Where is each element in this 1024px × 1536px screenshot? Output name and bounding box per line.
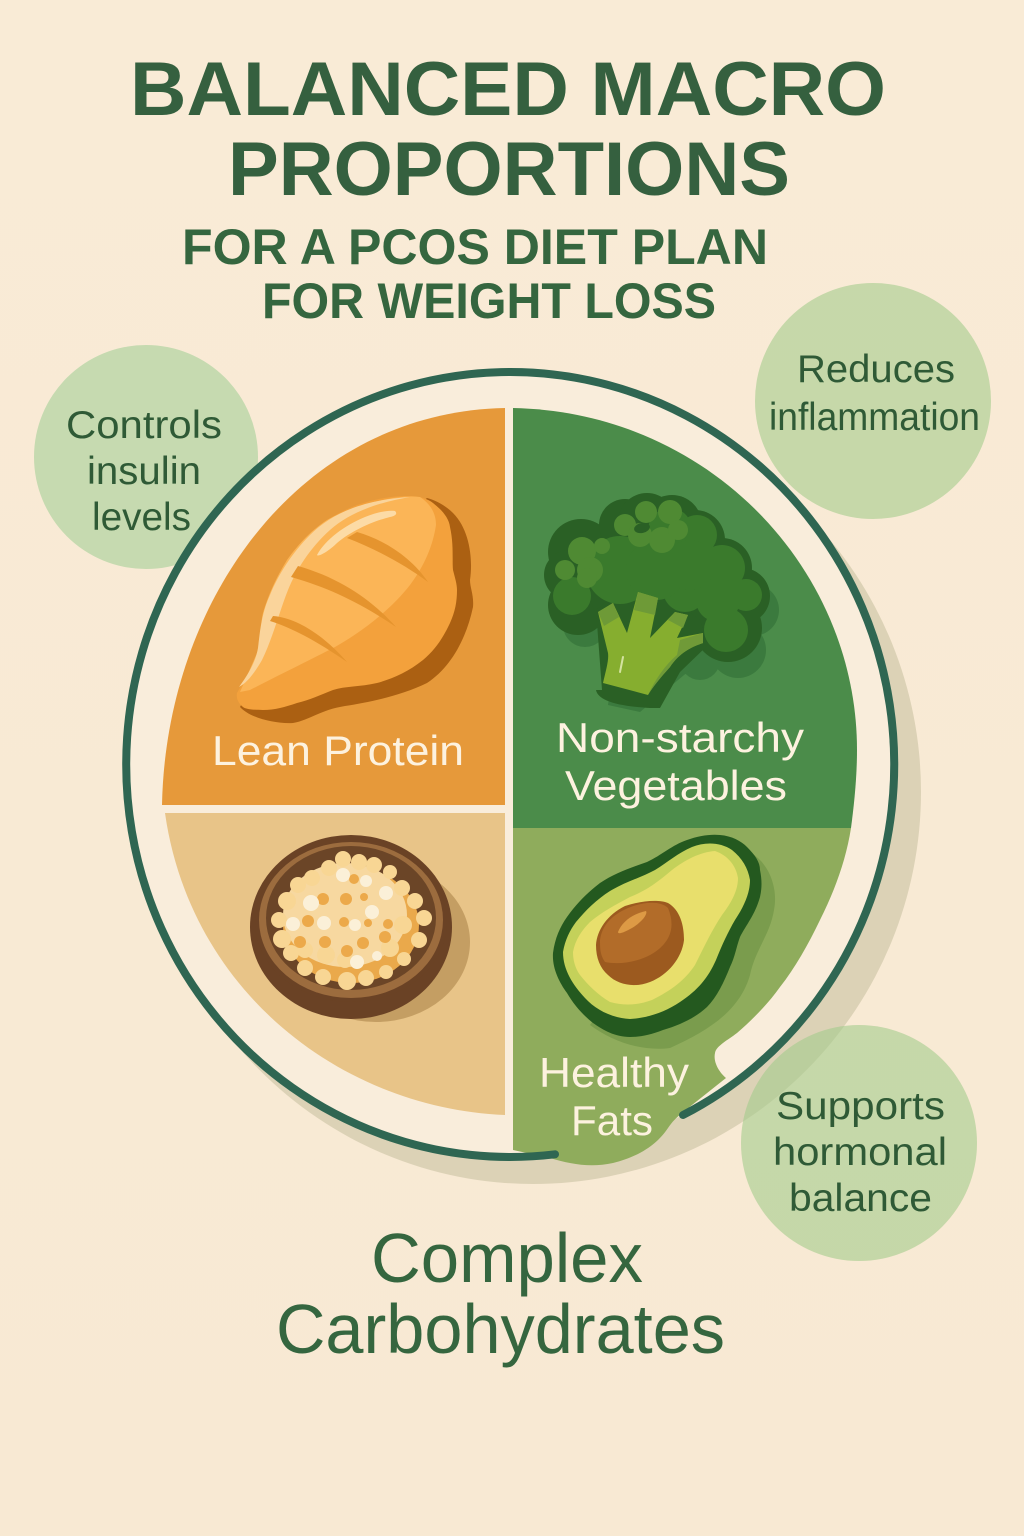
plate ring: [126, 372, 894, 1157]
plate base: [126, 373, 894, 1157]
callout bubble: supports hormonal balance: balance: [789, 1177, 932, 1220]
panel: healthy fats: [513, 828, 851, 1165]
icon: chicken breast: [237, 496, 473, 723]
callout bubble: supports hormonal balance: [741, 1025, 977, 1261]
subtitle: [182, 219, 768, 329]
callout bubble: supports hormonal balance: hormonal: [773, 1131, 947, 1174]
label: non-starchy vegetables: Non-starchy: [556, 714, 804, 761]
panel: complex carbohydrates: [165, 813, 505, 1115]
label: complex carbohydrates: Carbohydrates: [276, 1290, 725, 1368]
label: lean protein: Lean Protein: [212, 727, 464, 774]
callout bubble: supports hormonal balance: Supports: [776, 1085, 945, 1128]
icon: grain bowl: [250, 835, 470, 1022]
subtitle: FOR A PCOS DIET PLAN: [182, 219, 768, 275]
subtitle: FOR WEIGHT LOSS: [262, 273, 716, 329]
panel: lean protein: [162, 408, 505, 805]
title: BALANCED MACRO: [130, 47, 886, 132]
label: healthy fats: Fats: [571, 1097, 653, 1144]
callout text: controls insulin levels: insulin: [87, 450, 201, 493]
callout bubble: controls insulin levels: [34, 345, 258, 569]
callout bubble: reduces inflammation: [755, 283, 991, 519]
title: PROPORTIONS: [228, 127, 790, 212]
label: non-starchy vegetables: Vegetables: [565, 762, 787, 809]
label: complex carbohydrates: Complex: [371, 1219, 643, 1297]
icon: avocado: [553, 835, 775, 1049]
callout text: controls insulin levels: Controls: [66, 404, 222, 447]
icon: broccoli: [544, 493, 779, 712]
callout text: controls insulin levels: levels: [92, 496, 191, 539]
callout bubble: reduces inflammation: Reduces: [797, 348, 955, 391]
callout bubble: reduces inflammation: inflammation: [769, 396, 980, 439]
plate shadow: [145, 400, 921, 1184]
panel: non-starchy vegetables: [513, 408, 857, 828]
label: healthy fats: Healthy: [539, 1049, 689, 1096]
title: [130, 47, 886, 212]
